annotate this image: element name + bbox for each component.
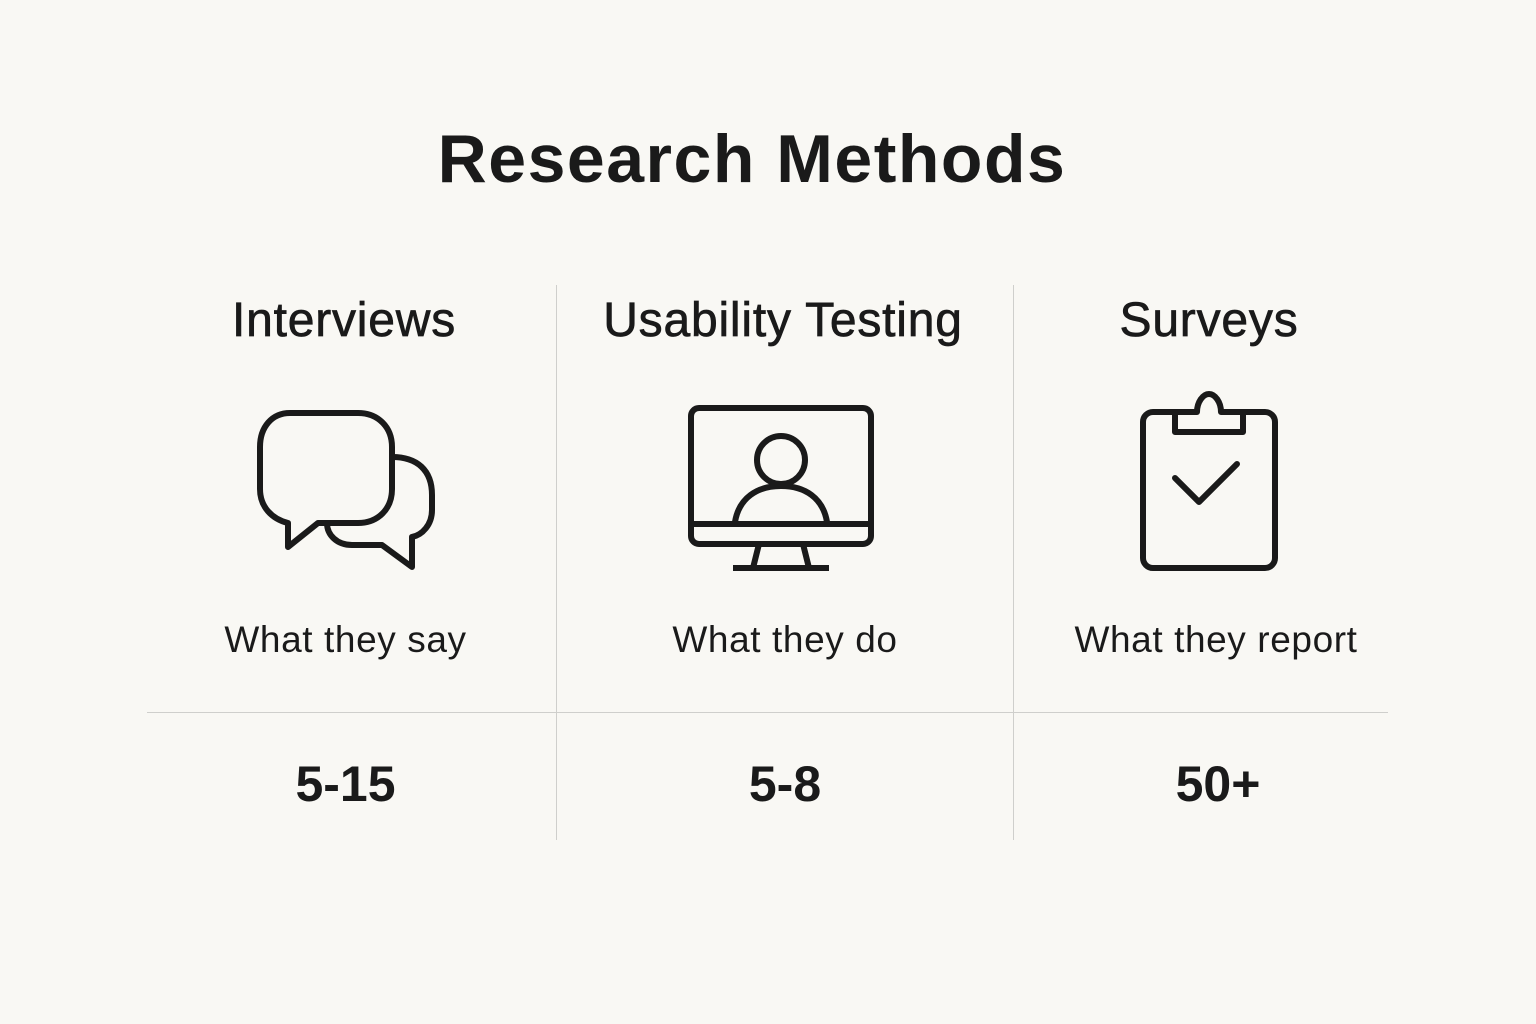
heading: interviews: Interviews <box>232 294 456 347</box>
panel: interviews <box>224 294 467 812</box>
panel: usability testing <box>603 294 963 812</box>
text: what they report: What they report <box>1074 619 1358 660</box>
title: Research Methods <box>438 121 1066 197</box>
panel: surveys <box>1074 294 1358 812</box>
icon: chat bubbles <box>257 410 435 570</box>
heading: usability testing: Usability Testing <box>603 294 963 347</box>
number: 50+: 50+ <box>1176 756 1260 812</box>
icon: clipboard check <box>1140 391 1278 571</box>
text: what they say: What they say <box>224 619 467 660</box>
number: 5-15: 5-15 <box>295 756 396 812</box>
icon: monitor with user <box>688 405 874 571</box>
number: 5-8: 5-8 <box>749 756 821 812</box>
text: what they do: What they do <box>672 619 898 660</box>
heading: surveys: Surveys <box>1120 294 1298 347</box>
